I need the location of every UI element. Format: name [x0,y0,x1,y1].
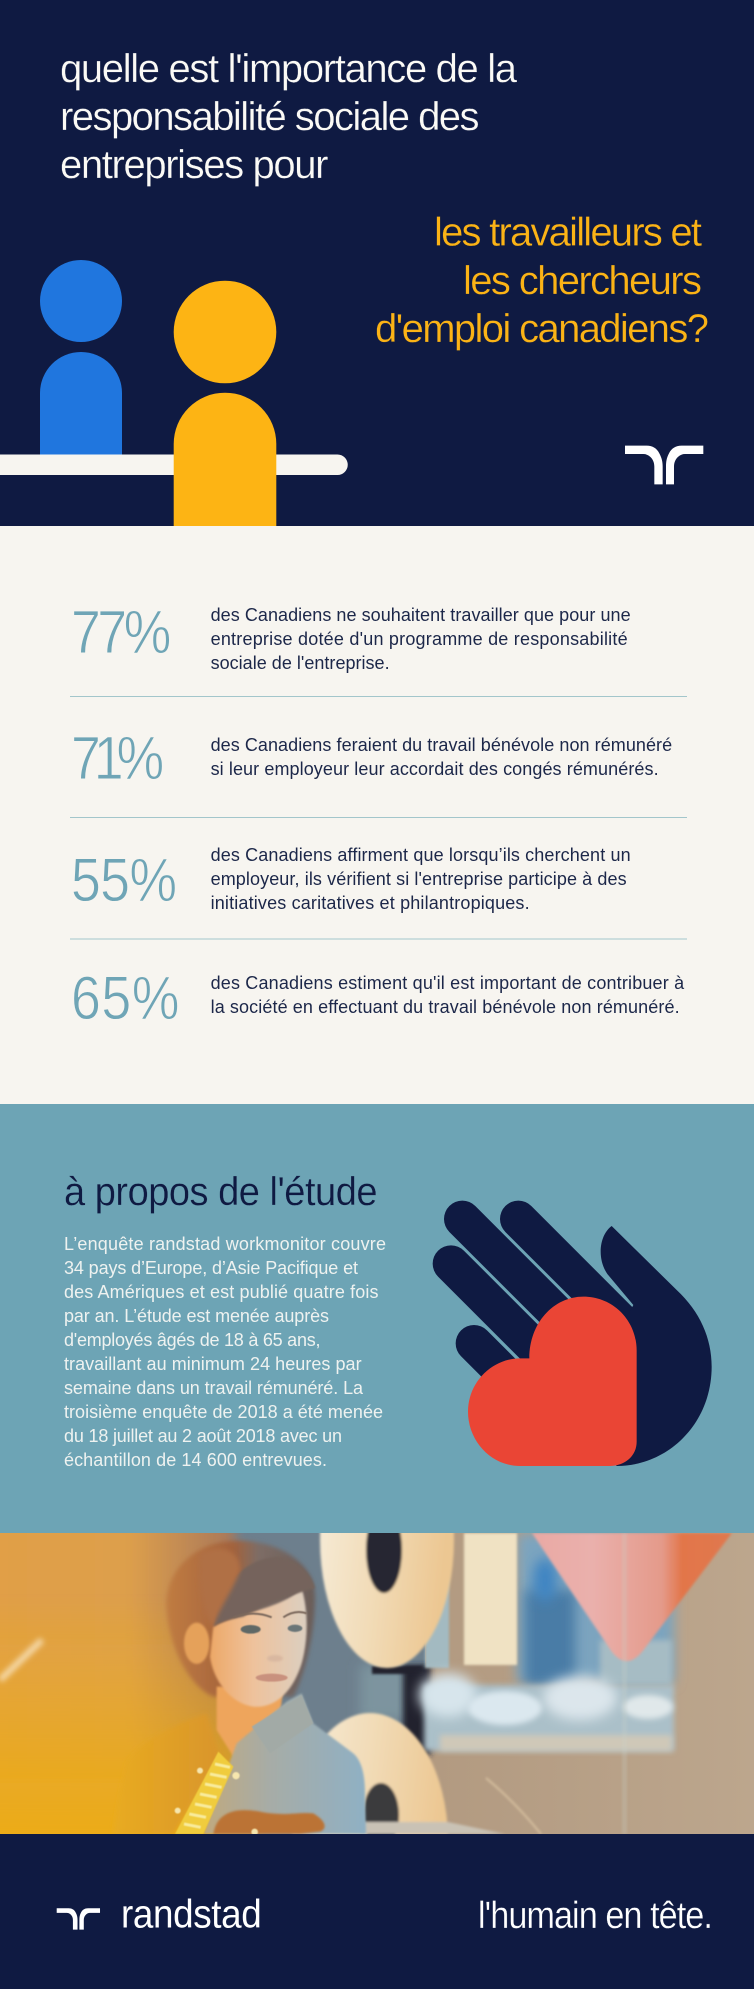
title: white question lines: quelle est l'importance de la [60,47,518,91]
text block: study description: troisième enquête de 2018 a été menée [64,1402,383,1422]
icon: hand holding heart [451,1219,712,1466]
stat: 65%: la société en effectuant du travail bénévole non rémunéré. [211,997,680,1017]
icon: cream table bar [0,454,348,475]
text block: study description: d'employés âgés de 18 à 65 ans, [64,1330,320,1350]
stat: 77%: entreprise dotée d'un programme de responsabilité [211,629,628,649]
text block: study description: par an. L’étude est menée auprès [64,1306,329,1326]
title: yellow question lines: d'emploi canadiens? [375,307,709,351]
stat: 71% [71,725,672,793]
title: yellow question lines: les chercheurs [463,259,702,303]
text block: study description: L’enquête randstad workmonitor couvre [64,1234,386,1254]
panel: footer [0,1834,754,1989]
hair strand at bottom [213,1810,325,1834]
shelf with white bowls [424,1685,674,1751]
stat: 77% [71,599,631,673]
face [210,1588,307,1707]
stat: 55% [71,845,631,915]
stat: 77%: sociale de l'entreprise. [211,653,390,673]
title: white question lines: entreprises pour [60,143,328,187]
nose shadow [267,1655,283,1662]
ear [184,1623,209,1664]
stat: 71%: des Canadiens feraient du travail bénévole non rémunéré [211,735,672,755]
title: yellow question lines [375,210,709,351]
buttons [175,1768,258,1835]
logo: randstad mark [57,1908,100,1930]
wooden disc one [318,1533,456,1670]
striped top [175,1752,233,1834]
cream rectangle [464,1533,517,1665]
panel: statistics [0,526,754,1104]
hand fingers [451,1219,620,1396]
light streak [486,1778,541,1834]
stat: 55%: des Canadiens affirment que lorsqu’ils cherchent un [211,845,631,865]
text block: study description: 34 pays d’Europe, d’Asie Pacifique et [64,1258,358,1278]
panel: about the study [0,1104,754,1533]
neck [217,1687,283,1757]
icon: randstad logo white [625,446,703,484]
wooden disc two [292,1711,502,1834]
collar [252,1696,314,1740]
stat: 77%: 77% [71,599,171,667]
hair back [166,1541,315,1697]
stat: 65% [71,965,685,1033]
text block: study description: échantillon de 14 600 entrevues. [64,1450,327,1470]
text block: study description: travaillant au minimum 24 heures par [64,1354,362,1374]
icon: yellow person [174,281,276,526]
stat: 55%: 55% [71,847,177,915]
title: yellow question lines: les travailleurs et [434,210,702,254]
text block: study description: des Amériques et est publié quatre fois [64,1282,378,1302]
stat: 55%: initiatives caritatives et philantropiques. [211,893,530,913]
stat: 55%: employeur, ils vérifient si l'entreprise participe à des [211,869,627,889]
panel: header [0,0,754,526]
stat: 77%: des Canadiens ne souhaitent travailler que pour une [211,605,631,625]
shirt [203,1693,366,1834]
photo: woman figure [113,1541,366,1835]
left warm glow [0,1533,242,1805]
heading: about the study: à propos de l'étude [64,1170,378,1214]
coral triangle [532,1533,732,1661]
eyes [241,1625,261,1634]
stat: 65%: des Canadiens estiment qu'il est important de contribuer à [211,973,685,993]
hand palm and thumb [553,1226,712,1466]
heart [468,1297,637,1466]
icon: blue person [40,260,122,456]
title: white question lines: responsabilité sociale des [60,95,480,139]
stat: 71%: si leur employeur leur accordait des congés rémunérés. [211,759,659,779]
tagline: l'humain en tête. [478,1893,713,1936]
blue window [517,1533,674,1683]
text block: study description: du 18 juillet au 2 août 2018 avec un [64,1426,342,1446]
wall and background tones [210,1533,425,1834]
text block: study description [64,1234,386,1470]
title: white question lines [60,47,518,187]
fringe [213,1557,315,1627]
jacket left [114,1715,211,1834]
text block: study description: semaine dans un travail rémunéré. La [64,1378,364,1398]
mouth [256,1674,288,1682]
logo: randstad wordmark: randstad [121,1892,262,1937]
photo: smiling woman in office [0,1533,754,1834]
stat: 65%: 65% [71,965,180,1033]
stat: 71%: 71% [71,725,164,793]
